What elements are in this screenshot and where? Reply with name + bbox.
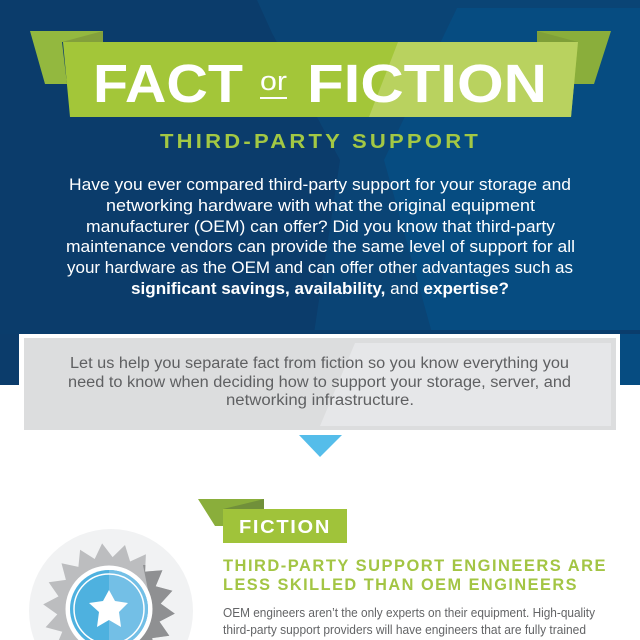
title text: FACT <box>93 54 243 114</box>
arrow: down triangle <box>299 435 342 457</box>
fiction label <box>198 499 347 543</box>
ribbon left tail <box>30 31 103 84</box>
fiction heading: THIRD-PARTY SUPPORT ENGINEERS ARE <box>223 557 607 575</box>
fiction heading: LESS SKILLED THAN OEM ENGINEERS <box>223 576 578 594</box>
title text: FICTION <box>307 54 547 114</box>
callout text <box>68 355 571 409</box>
subtitle: THIRD-PARTY SUPPORT <box>160 130 481 153</box>
panel: dark blue header background <box>0 0 640 385</box>
badge medal <box>66 565 154 640</box>
intro paragraph: maintenance vendors can provide the same level of support for all <box>66 238 575 256</box>
title text <box>93 54 547 114</box>
fiction body text: OEM engineers aren’t the only experts on their equipment. High-quality <box>223 605 595 620</box>
ribbon main band <box>63 42 578 117</box>
callout text: networking infrastructure. <box>226 392 414 409</box>
intro paragraph: Have you ever compared third-party support for your storage and <box>69 176 571 194</box>
badge starburst shaded side <box>140 565 175 640</box>
callout text: need to know when deciding how to support your storage, server, and <box>68 374 571 391</box>
intro paragraph: significant savings, availability, and expertise? <box>131 280 509 298</box>
fiction heading <box>223 557 607 594</box>
label text: FICTION <box>239 517 331 537</box>
intro paragraph: your hardware as the OEM and can offer other advantages such as <box>67 259 573 277</box>
panel: gray callout box <box>19 334 620 434</box>
title ribbon <box>30 31 611 117</box>
badge star <box>89 590 128 627</box>
callout text: Let us help you separate fact from fiction so you know everything you <box>70 355 569 372</box>
intro paragraph: manufacturer (OEM) can offer? Did you know that third-party <box>86 218 556 236</box>
badge background circle <box>29 529 193 640</box>
badge starburst <box>43 543 175 640</box>
title text: or <box>260 66 287 96</box>
fiction body text: third-party support providers will have engineers that are fully trained <box>223 622 586 637</box>
intro paragraph <box>66 176 575 298</box>
label band <box>223 509 347 543</box>
label tail <box>198 499 264 526</box>
intro paragraph: networking hardware with what the original equipment <box>106 197 535 215</box>
ribbon right tail <box>537 31 611 84</box>
fiction body text <box>223 605 595 637</box>
icon: star badge <box>29 529 193 640</box>
